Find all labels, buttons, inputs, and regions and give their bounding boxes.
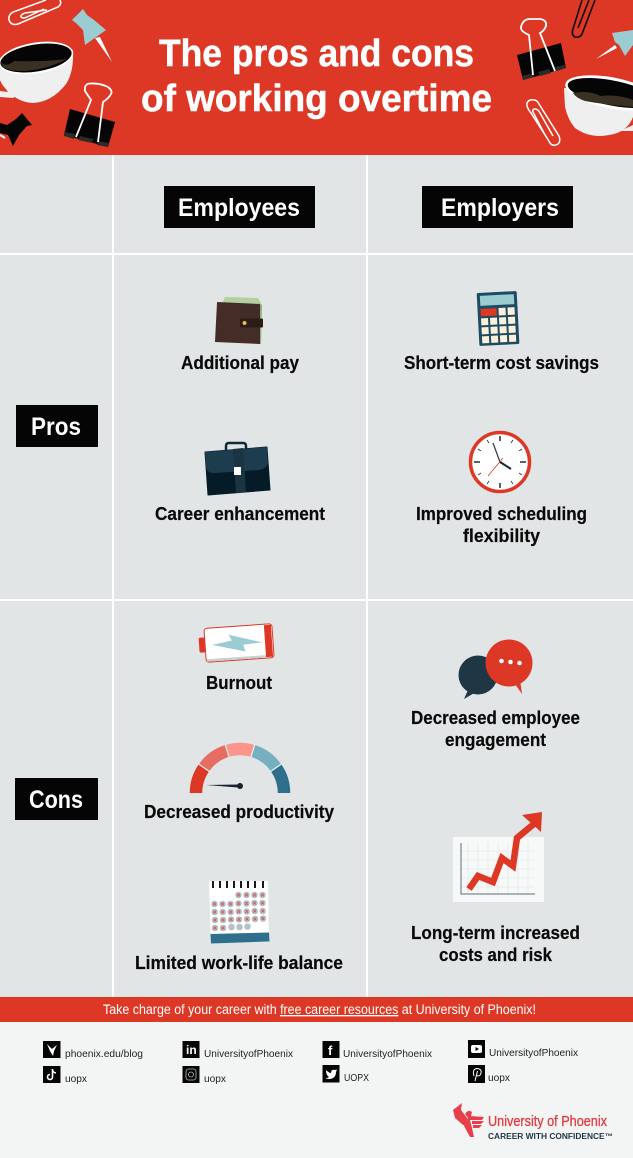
item: decreased productivity (144, 744, 335, 822)
social: instagram (182, 1066, 227, 1085)
label: decreased employee engagement: engagement (445, 729, 546, 750)
icon: coffee cup right (562, 69, 633, 136)
title (141, 33, 492, 120)
icon: black binder clip right (517, 19, 566, 80)
social: linkedin: UniversityofPhoenix (204, 1048, 294, 1060)
label: decreased employee engagement: Decreased employee (411, 707, 580, 728)
panel: footer background (0, 1022, 633, 1158)
label: career enhancement: Career enhancement (155, 503, 325, 524)
call to action banner: Take charge of your career with free career resources at University of Phoenix! (103, 1002, 536, 1017)
social: facebook: f (328, 1043, 333, 1058)
logo wordmark: University of Phoenix (488, 1113, 607, 1130)
icon: white paperclip right (527, 100, 560, 145)
label: limited work-life balance: Limited work-life balance (135, 952, 343, 973)
icon: coffee cup left (0, 37, 75, 103)
icon: blue push pin left (72, 9, 112, 62)
social: instagram: uopx (204, 1073, 227, 1085)
logo tagline: CAREER WITH CONFIDENCE™ (488, 1132, 613, 1141)
icon: white paperclip top left (9, 0, 61, 24)
heading: Employees (164, 186, 315, 228)
item: long-term increased costs and risk (411, 812, 580, 965)
icon: calendar (209, 881, 270, 944)
item: limited work-life balance (135, 881, 343, 973)
icon: black paperclip top right (572, 0, 595, 37)
social: tiktok: uopx (65, 1073, 88, 1085)
social: twitter: UOPX (344, 1072, 369, 1084)
item: career enhancement (155, 443, 325, 524)
icon: gauge (196, 744, 284, 793)
icon: briefcase (205, 443, 270, 495)
heading: Employees: Employees (178, 194, 300, 222)
social: facebook (322, 1041, 433, 1060)
heading: Pros: Pros (31, 413, 81, 441)
item: additional pay (181, 297, 300, 373)
icon: rising line chart (453, 812, 544, 902)
icon: black push pin bottom left (0, 113, 32, 146)
social: linkedin (182, 1041, 294, 1060)
label: long-term increased costs and risk: Long-term increased (411, 922, 580, 943)
social: facebook: UniversityofPhoenix (343, 1048, 433, 1060)
label: decreased productivity: Decreased productivity (144, 801, 335, 822)
item: improved scheduling flexibility (416, 432, 587, 546)
social: pinterest (468, 1065, 511, 1084)
label: improved scheduling flexibility: Improved scheduling (416, 503, 587, 524)
heading: Employers (422, 186, 573, 228)
item: burnout (198, 624, 274, 693)
heading: Pros (16, 405, 98, 447)
social: youtube (468, 1040, 579, 1059)
label: additional pay: Additional pay (181, 352, 300, 373)
social: youtube: UniversityofPhoenix (489, 1047, 579, 1059)
social: twitter (322, 1065, 369, 1084)
social: tiktok (43, 1066, 88, 1085)
title: of working overtime (141, 78, 492, 120)
heading: Cons: Cons (29, 786, 83, 814)
icon: calculator (477, 291, 519, 346)
heading: Cons (15, 778, 98, 820)
icon: blue push pin right (596, 30, 633, 59)
social: linkedin: in (186, 1043, 197, 1057)
label: long-term increased costs and risk: costs and risk (439, 944, 553, 965)
call to action banner (0, 997, 633, 1022)
social: blog: phoenix.edu/blog (65, 1048, 143, 1060)
heading: Employers: Employers (441, 194, 559, 222)
social: pinterest: uopx (488, 1072, 511, 1084)
icon: clock (470, 432, 530, 492)
icon: wallet (216, 297, 263, 344)
label: improved scheduling flexibility: flexibility (463, 525, 541, 546)
social: blog (43, 1041, 143, 1060)
label: burnout: Burnout (206, 672, 272, 693)
logo: University of Phoenix (453, 1103, 613, 1141)
label: improved scheduling flexibility (416, 503, 587, 546)
title: The pros and cons (159, 33, 474, 75)
icon: speech bubbles (458, 640, 532, 699)
label: long-term increased costs and risk (411, 922, 580, 965)
item: decreased employee engagement (411, 640, 580, 750)
icon: black binder clip left (64, 83, 115, 147)
icon: phoenix bird (453, 1103, 484, 1137)
panel: header banner (0, 0, 633, 155)
label: decreased employee engagement (411, 707, 580, 750)
label: short-term cost savings: Short-term cost savings (404, 352, 599, 373)
item: short-term cost savings (404, 291, 599, 373)
panel: table grid (0, 155, 633, 997)
icon: battery (198, 624, 274, 663)
